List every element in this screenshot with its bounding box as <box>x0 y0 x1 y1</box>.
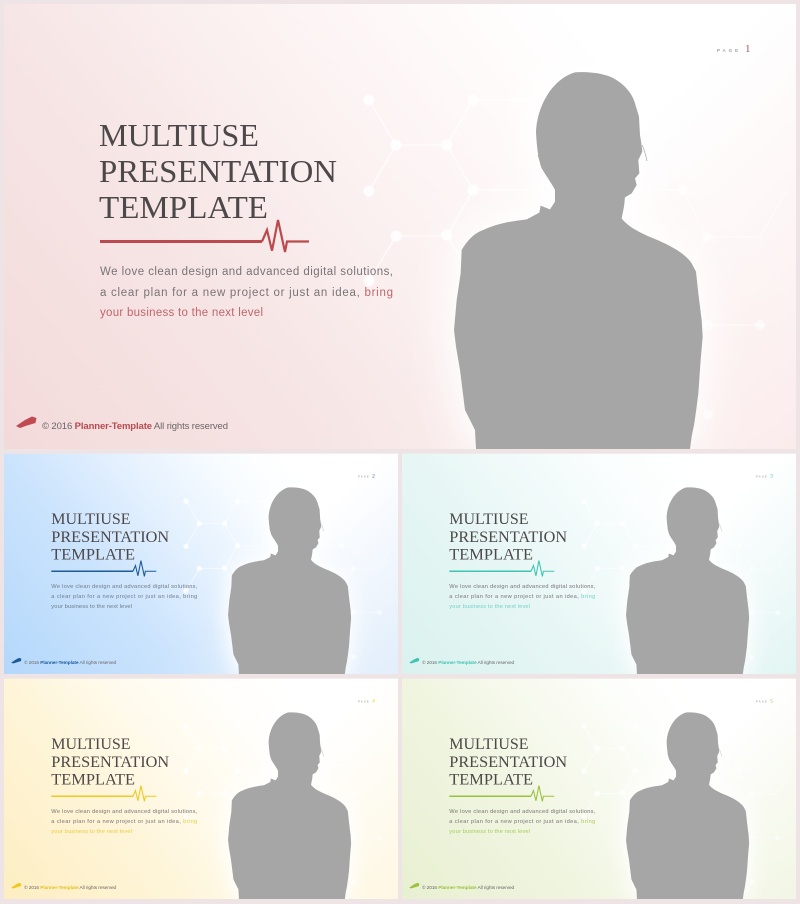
body text <box>449 584 596 610</box>
body text <box>51 584 198 610</box>
page number: 4 <box>372 698 375 704</box>
page label: PAGE <box>756 475 768 478</box>
page label: PAGE <box>358 700 370 703</box>
footer icon <box>409 658 419 664</box>
footer text: © 2016 Planner-Template All rights reserved <box>42 421 228 432</box>
title: TEMPLATE <box>51 772 135 789</box>
heartbeat line <box>51 786 156 801</box>
white glow behind silhouette <box>447 271 706 449</box>
title: TEMPLATE <box>51 547 135 564</box>
panel: green slide <box>402 679 796 899</box>
panel: yellow slide <box>4 679 398 899</box>
title <box>449 736 568 789</box>
footer icon <box>16 416 36 428</box>
footer text: © 2016 Planner-Template All rights reserved <box>422 884 515 890</box>
hexagon network <box>364 94 787 420</box>
title: PRESENTATION <box>51 754 170 771</box>
title: PRESENTATION <box>51 529 170 546</box>
title: MULTIUSE <box>449 736 529 753</box>
heartbeat line <box>449 561 554 576</box>
body text: your business to the next level <box>449 829 530 835</box>
body text <box>100 266 393 319</box>
body text: We love clean design and advanced digital solutions, <box>449 584 596 590</box>
silhouette <box>228 487 351 674</box>
title <box>99 117 337 225</box>
body text: We love clean design and advanced digital solutions, <box>449 809 596 815</box>
body text: a clear plan for a new project or just an idea, bring <box>100 287 393 299</box>
title: MULTIUSE <box>449 511 529 528</box>
title: TEMPLATE <box>449 547 533 564</box>
body text: a clear plan for a new project or just an idea, bring <box>449 594 595 600</box>
title <box>449 511 568 564</box>
title: TEMPLATE <box>449 772 533 789</box>
title: MULTIUSE <box>99 117 259 153</box>
page number: 2 <box>372 473 375 479</box>
footer icon <box>11 883 21 889</box>
body text: a clear plan for a new project or just an idea, bring <box>449 819 595 825</box>
body text <box>449 809 596 835</box>
page number: 5 <box>770 698 773 704</box>
title: TEMPLATE <box>99 189 268 225</box>
panel: teal slide <box>402 454 796 674</box>
page label: PAGE <box>358 475 370 478</box>
body text: a clear plan for a new project or just an idea, bring <box>51 819 197 825</box>
body text: a clear plan for a new project or just an idea, bring <box>51 594 197 600</box>
silhouette <box>626 712 749 899</box>
body text: your business to the next level <box>51 829 132 835</box>
title: MULTIUSE <box>51 511 131 528</box>
footer text: © 2016 Planner-Template All rights reserved <box>422 659 515 665</box>
panel: large red slide <box>4 4 796 449</box>
footer icon <box>409 883 419 889</box>
body text: your business to the next level <box>51 604 132 610</box>
panel: blue slide <box>4 454 398 674</box>
body text: We love clean design and advanced digital solutions, <box>100 266 393 278</box>
body text <box>51 809 198 835</box>
title: PRESENTATION <box>449 754 568 771</box>
heartbeat line <box>100 220 309 252</box>
title <box>51 736 170 789</box>
silhouette <box>228 712 351 899</box>
body text: your business to the next level <box>100 307 263 319</box>
footer text: © 2016 Planner-Template All rights reserved <box>24 884 117 890</box>
silhouette <box>454 72 703 449</box>
page label: PAGE <box>756 700 768 703</box>
body text: your business to the next level <box>449 604 530 610</box>
footer text: © 2016 Planner-Template All rights reserved <box>24 659 117 665</box>
page number: 1 <box>745 43 750 55</box>
title: PRESENTATION <box>99 153 337 189</box>
title: MULTIUSE <box>51 736 131 753</box>
page number: 3 <box>770 473 773 479</box>
heartbeat line <box>51 561 156 576</box>
silhouette <box>626 487 749 674</box>
footer icon <box>11 658 21 664</box>
body text: We love clean design and advanced digital solutions, <box>51 809 198 815</box>
title <box>51 511 170 564</box>
page label: PAGE <box>717 48 741 53</box>
heartbeat line <box>449 786 554 801</box>
body text: We love clean design and advanced digital solutions, <box>51 584 198 590</box>
title: PRESENTATION <box>449 529 568 546</box>
